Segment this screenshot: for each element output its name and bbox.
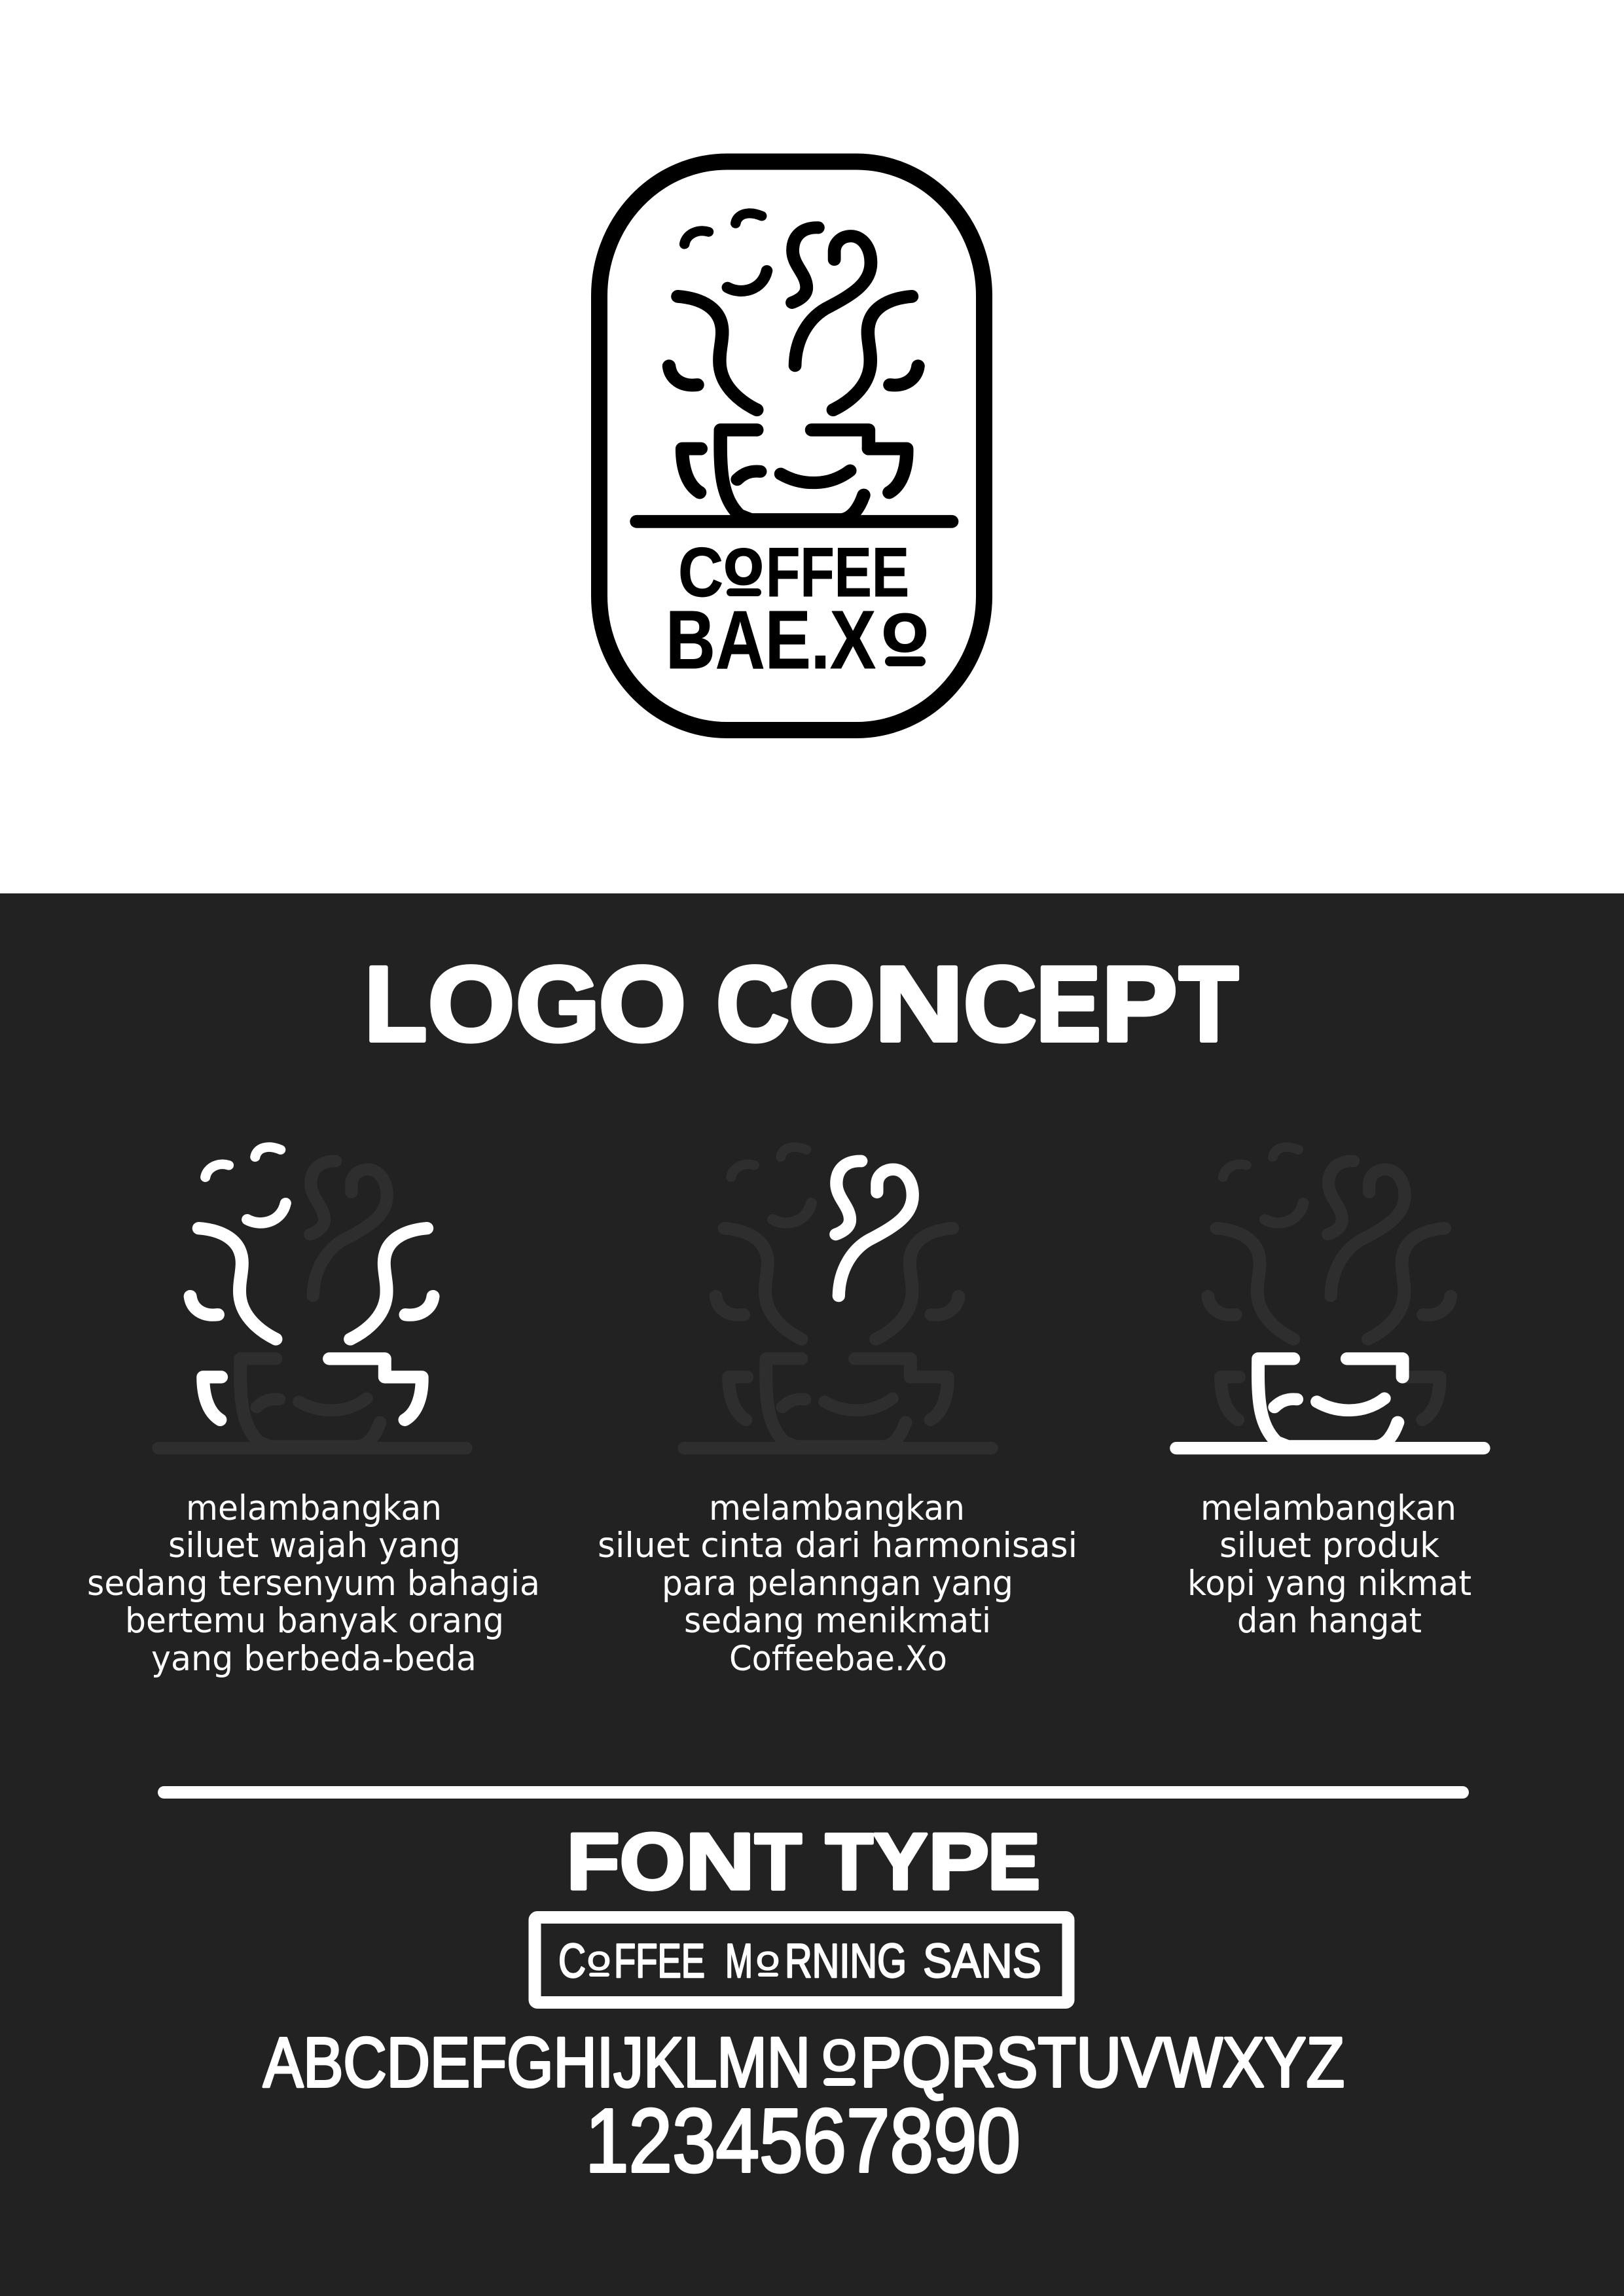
text block: product silhouette description: siluet produk [1219,1526,1439,1566]
logo wordmark: BAE.XO: BAE.X [666,594,876,686]
logo wordmark: COFFEE [678,533,909,611]
icon: face silhouette highlighted [158,1147,466,1448]
heading: FONT TYPE: E [988,1817,1040,1906]
text block: face silhouette description [87,1488,540,1679]
panel: white logo area [0,0,1624,893]
font name: COFFEE MORNING SANS: O [757,1948,779,1975]
logo wordmark: COFFEE: O [725,539,763,594]
logo wordmark: COFFEE: FFEE [766,533,909,611]
box frame [535,1918,1068,2003]
divider bar [158,1786,1469,1799]
font specimen: numerals: 1234567890 [585,2090,1020,2191]
heading: LOGO CONCEPT: P [1102,944,1178,1064]
font name: COFFEE MORNING SANS: RNING [785,1935,907,1988]
heading: LOGO CONCEPT: O [788,944,876,1064]
heading: LOGO CONCEPT: L [365,944,427,1064]
logo wordmark: BAE.XO: O [883,603,928,662]
icon: coffee cup highlighted [1176,1147,1484,1448]
main logo badge [600,162,984,730]
font specimen: alphabet [263,2022,1344,2102]
font name: COFFEE MORNING SANS: O [588,1948,610,1975]
logo mark: coffee cup and steam [637,213,952,522]
text block: love silhouette description: melambangkan [709,1488,965,1528]
font name box [535,1918,1068,2003]
heading: FONT TYPE: T [825,1817,873,1906]
heading: LOGO CONCEPT: G [516,944,600,1064]
heading: FONT TYPE: O [620,1817,685,1906]
panel: dark concept area [0,893,1624,2296]
text block: product silhouette description: melambangkan [1200,1488,1456,1528]
text block: face silhouette description: bertemu banyak orang [125,1601,504,1641]
heading: LOGO CONCEPT: O [598,944,686,1064]
heading: FONT TYPE: P [928,1817,989,1906]
text block: face silhouette description: melambangkan [186,1488,442,1528]
font name: COFFEE MORNING SANS: M [725,1935,753,1988]
font specimen: alphabet: PQRSTUVWXYZ [860,2022,1344,2102]
heading: LOGO CONCEPT: C [716,944,789,1064]
font specimen: alphabet: ABCDEFGHIJKLMN [263,2022,810,2102]
logo wordmark: COFFEE: C [678,533,723,611]
text block: face silhouette description: yang berbeda-beda [151,1639,477,1679]
text block: love silhouette description: para pelanngan yang [662,1564,1013,1604]
heading: FONT TYPE: Y [873,1817,928,1906]
text block: face silhouette description: sedang tersenyum bahagia [87,1564,540,1604]
heading: LOGO CONCEPT: N [875,944,964,1064]
text block: love silhouette description: Coffeebae.Xo [729,1639,947,1679]
font name: COFFEE MORNING SANS [558,1935,1041,1988]
icon: love steam highlighted [684,1147,992,1448]
font name: COFFEE MORNING SANS: SANS [923,1935,1041,1988]
heading: LOGO CONCEPT: E [1036,944,1101,1064]
text block: product silhouette description [1187,1488,1471,1641]
text block: product silhouette description: kopi yang nikmat [1187,1564,1471,1604]
text block: love silhouette description [598,1488,1077,1679]
heading: LOGO CONCEPT: T [1179,944,1238,1064]
text block: love silhouette description: sedang menikmati [684,1601,991,1641]
text block: love silhouette description: siluet cinta dari harmonisasi [598,1526,1077,1566]
heading: LOGO CONCEPT: C [964,944,1037,1064]
heading: LOGO CONCEPT: O [428,944,514,1064]
text block: product silhouette description: dan hangat [1237,1601,1422,1641]
heading: FONT TYPE: T [755,1817,802,1906]
logo frame [600,162,984,730]
text block: face silhouette description: siluet wajah yang [168,1526,461,1566]
font name: COFFEE MORNING SANS: C [558,1935,586,1988]
heading: FONT TYPE: N [685,1817,755,1906]
font name: COFFEE MORNING SANS: FFEE [614,1935,705,1988]
font specimen: alphabet: O [823,2031,856,2079]
heading: FONT TYPE: F [567,1817,620,1906]
